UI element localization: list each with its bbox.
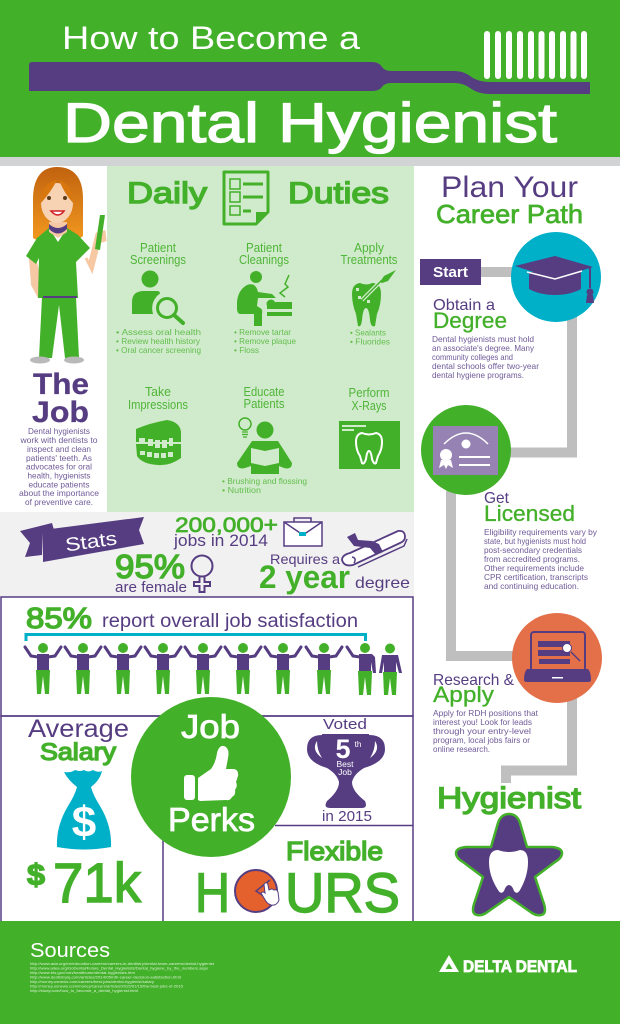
panel: average salary: Average xyxy=(28,715,129,743)
icon: trophy: th xyxy=(355,740,361,749)
icon: money bag: $ xyxy=(72,798,96,847)
icon: trophy xyxy=(307,734,385,808)
duty: perform x-rays: Perform xyxy=(348,386,390,400)
duty: apply treatments xyxy=(340,241,398,346)
stat: 95 percent female: are female xyxy=(115,579,187,596)
list: source urls xyxy=(30,961,215,993)
duty: educate patients: Patients xyxy=(244,397,284,411)
panel: voted fifth best job xyxy=(307,716,385,825)
list: source urls: http://www.adea.org/GoDental/Future_Dental_Hygienists/Dental_hygiene_by_the_numbers.aspx xyxy=(30,966,208,970)
step: research and apply: interest you! Look for leads xyxy=(433,717,532,727)
heading: the job: Job xyxy=(32,396,89,429)
title line 2: Dental Hygienist xyxy=(63,91,558,154)
stat: two year degree xyxy=(259,551,410,595)
ribbon: stats xyxy=(20,517,144,562)
duty: patient screenings: Patient xyxy=(140,241,176,255)
list: • Floss xyxy=(234,345,259,355)
step: get licensed: state, but hygienists must hold xyxy=(484,536,586,546)
badge: job perks: Job xyxy=(181,708,240,745)
list xyxy=(234,327,296,355)
panel: voted fifth best job: in 2015 xyxy=(322,808,372,825)
text: job description: Dental hygienists xyxy=(28,426,90,436)
start box xyxy=(420,259,481,285)
heading: daily duties: Daily xyxy=(127,177,207,210)
icon: person reading xyxy=(237,418,292,474)
step: get licensed: Get xyxy=(484,490,510,507)
value: salary: 71k xyxy=(53,851,142,914)
badge: job perks xyxy=(131,697,291,857)
list: source urls: http://www.dentistryiq.com/articles/2014/05/rdh-career-decision-satisfaction.html xyxy=(30,974,181,980)
duty: perform x-rays xyxy=(339,386,400,469)
icon: tooth treatment xyxy=(352,270,396,326)
step: research and apply: online research. xyxy=(433,744,490,754)
duty: apply treatments: Treatments xyxy=(340,253,398,267)
value: salary: $ xyxy=(27,859,45,892)
icon: x-ray xyxy=(339,421,400,469)
duty: patient cleanings xyxy=(234,241,296,355)
panel: flexible hours: URS xyxy=(285,861,400,924)
step: obtain a degree: Obtain a xyxy=(433,297,495,314)
footer xyxy=(0,921,620,1024)
duty: take impressions xyxy=(128,385,188,465)
step: get licensed: and continuing education. xyxy=(484,581,579,591)
icon: star with tooth xyxy=(456,814,562,915)
stat: 85 percent xyxy=(26,603,358,635)
list: source urls: http://money.usnews.com/careers/best-jobs/dental-hygienist/salary xyxy=(30,979,154,984)
panel: average salary: Salary xyxy=(40,739,116,766)
step: obtain a degree: Dental hygienists must hold xyxy=(432,334,534,344)
duty: take impressions: Impressions xyxy=(128,398,188,412)
heading: plan your career path: Career Path xyxy=(436,199,583,229)
step: obtain a degree: dental hygiene programs. xyxy=(432,370,524,380)
stat: two year degree: 2 year xyxy=(259,559,350,595)
text: job description: about the importance xyxy=(19,488,99,498)
icon: checklist xyxy=(224,172,268,224)
duty: take impressions: Take xyxy=(145,385,171,399)
text: job description: work with dentists to xyxy=(19,435,98,445)
icon: trophy: Job xyxy=(338,767,352,777)
heading: the job xyxy=(32,368,89,429)
logo: delta dental: DELTA DENTAL xyxy=(463,958,577,976)
panel: flexible hours: Flexible xyxy=(286,836,383,866)
icon: female symbol xyxy=(192,556,212,592)
start box: Start xyxy=(433,264,468,281)
list xyxy=(222,476,307,495)
stat: 85 percent: 85% xyxy=(26,603,92,635)
list: • Review health history xyxy=(116,336,201,346)
step: obtain a degree: an associate's degree. Many xyxy=(432,343,535,353)
text: job description: inspect and clean xyxy=(27,444,91,454)
duty: educate patients: Educate xyxy=(244,385,285,399)
stat: two year degree: degree xyxy=(355,575,410,592)
icon: laptop xyxy=(512,613,602,703)
duty: apply treatments: Apply xyxy=(354,241,385,255)
step: get licensed: CPR certification, transcripts xyxy=(484,572,588,582)
panel: the job xyxy=(19,167,105,507)
duty: patient screenings: Screenings xyxy=(130,253,186,267)
step: get licensed: Other requirements include xyxy=(484,563,584,573)
list: • Assess oral health xyxy=(116,327,201,337)
panel: job satisfaction xyxy=(1,597,413,716)
ribbon: stats: Stats xyxy=(64,528,118,557)
icon: hygienist cleaning patient xyxy=(237,271,292,326)
panel: average salary xyxy=(27,715,142,914)
step: research and apply: Apply xyxy=(433,682,494,707)
list: • Sealants xyxy=(350,328,386,338)
icon: trophy: 5 xyxy=(335,734,351,764)
step: get licensed: post-secondary credentials xyxy=(484,545,582,555)
badge: job perks: Perks xyxy=(168,801,255,838)
bracket xyxy=(26,634,366,641)
heading: daily duties: Duties xyxy=(288,177,389,210)
stat: two year degree: Requires a xyxy=(270,551,340,567)
step: research and apply: program, local jobs fairs or xyxy=(433,735,530,745)
icon: certificate xyxy=(421,405,511,495)
list xyxy=(350,328,390,346)
panel: lower perks frame xyxy=(1,716,413,922)
list: • Remove plaque xyxy=(234,336,296,346)
list: source urls: http://www.ada.org/en/education-careers/careers-in-dentistry/dental-team-careers/dental-hygienist xyxy=(30,961,215,966)
stat: 95 percent female: 95% xyxy=(115,548,185,585)
step: get licensed xyxy=(484,490,598,591)
icon: thumbs up xyxy=(184,746,238,801)
text: job description: of preventive care. xyxy=(25,497,93,507)
icon: person with magnifier xyxy=(132,270,183,323)
step: research and apply: Research & xyxy=(433,672,514,689)
panel: flexible hours xyxy=(195,836,400,924)
list: • Remove tartar xyxy=(234,327,291,337)
stat: 200,000 jobs: jobs in 2014 xyxy=(173,531,268,550)
duty: perform x-rays: X-Rays xyxy=(352,399,386,413)
step: research and apply: through your entry-level xyxy=(433,726,531,736)
list: • Nutrition xyxy=(222,485,261,495)
heading: the job: The xyxy=(33,368,89,401)
duty: patient screenings xyxy=(116,241,201,355)
text: job description: educate patients xyxy=(28,480,90,490)
icon: dentures xyxy=(136,420,181,465)
step: obtain a degree: dental schools offer two-year xyxy=(432,361,539,371)
text: job description: advocates for oral xyxy=(26,462,92,472)
list: source urls: http://money.usnews.com/money/careers/articles/2015/01/15/the-best-jobs-of-2015 xyxy=(30,984,184,988)
panel: plan your career path xyxy=(420,171,602,915)
panel: daily duties xyxy=(107,166,414,512)
header banner xyxy=(0,0,620,166)
icon: trophy: Best xyxy=(336,759,354,769)
panel: flexible hours: H xyxy=(195,861,230,924)
duty: patient cleanings: Cleanings xyxy=(239,253,289,267)
stat: 200,000 jobs: 200,000+ xyxy=(175,514,278,537)
text: job description: health, hygienists xyxy=(28,470,90,480)
heading: hygienist: Hygienist xyxy=(437,782,582,815)
list: • Oral cancer screening xyxy=(116,345,201,355)
panel: stats xyxy=(0,512,414,597)
title line 1: How to Become a xyxy=(62,20,360,56)
step: research and apply: Apply for RDH positions that xyxy=(433,708,539,718)
step: research and apply xyxy=(433,672,539,754)
text: job description xyxy=(19,426,99,507)
duty: educate patients xyxy=(222,385,307,495)
icon: toothbrush xyxy=(29,31,590,94)
heading: plan your career path: Plan Your xyxy=(441,171,578,204)
heading: daily duties xyxy=(127,177,389,210)
icon: money bag xyxy=(57,770,111,850)
logo: delta dental xyxy=(439,955,577,976)
list: • Fluorides xyxy=(350,336,390,346)
career path connector xyxy=(451,272,572,783)
panel: voted fifth best job: Voted xyxy=(323,716,367,733)
illustration: hygienist xyxy=(26,167,105,364)
stat: 85 percent: report overall job satisfaction xyxy=(102,611,358,632)
list xyxy=(116,327,201,355)
list: • Brushing and flossing xyxy=(222,476,307,486)
list: source urls: http://www.bls.gov/ooh/healthcare/dental-hygienists.htm xyxy=(30,970,136,975)
text: job description: patients' teeth. As xyxy=(26,453,92,463)
heading: plan your career path xyxy=(436,171,583,229)
stat: 200,000 jobs xyxy=(173,514,278,550)
icon: graduation cap xyxy=(511,232,601,322)
step: obtain a degree xyxy=(432,297,539,380)
icon: diploma xyxy=(342,531,407,567)
step: obtain a degree: community colleges and xyxy=(432,352,513,362)
step: get licensed: Eligibility requirements vary by xyxy=(484,527,598,537)
heading: sources: Sources xyxy=(30,940,110,962)
step: get licensed: from accredited programs. xyxy=(484,554,580,564)
duty: patient cleanings: Patient xyxy=(246,241,282,255)
icon: briefcase xyxy=(284,518,322,546)
step: get licensed: Licensed xyxy=(484,501,575,526)
icon: clock with pointer xyxy=(235,870,279,912)
step: obtain a degree: Degree xyxy=(433,308,507,333)
list: source urls: http://study.com/how_to_become_a_dental_hygienist.html xyxy=(30,988,138,993)
pictogram: ten workers xyxy=(25,643,402,695)
